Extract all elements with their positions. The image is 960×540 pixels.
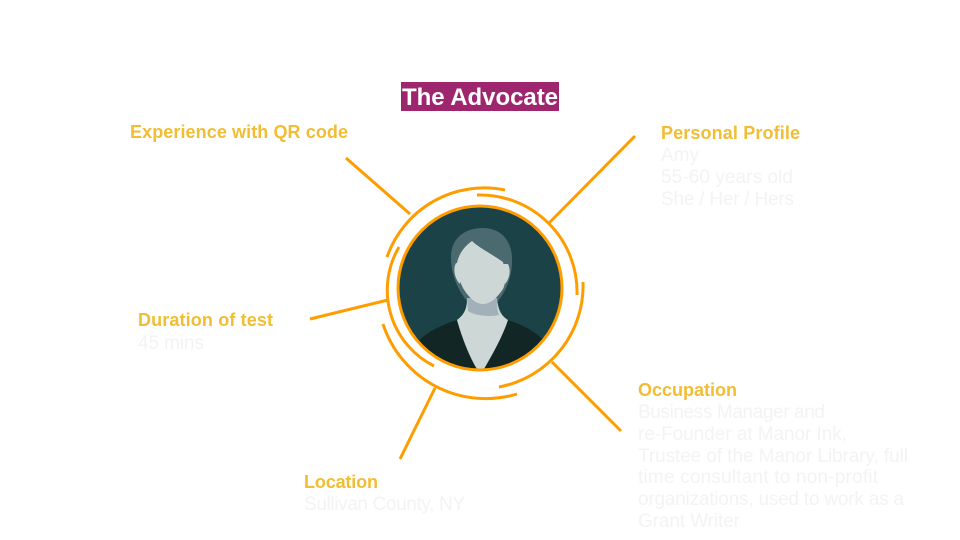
label: experience with QR code: Experience with QR code: [130, 122, 348, 142]
label: location: Location: [304, 472, 378, 492]
neck and chest: [457, 298, 508, 369]
label: duration of test: 45 mins: [138, 333, 204, 354]
portrait: woman avatar: [398, 206, 562, 375]
label: occupation: Occupation: [638, 380, 737, 400]
hair: [451, 228, 512, 301]
label: duration of test: Duration of test: [138, 310, 273, 330]
neck shadow: [467, 298, 499, 316]
label: occupation: re-Founder at Manor Ink,: [638, 424, 847, 445]
decorative orbit arcs: [383, 188, 583, 399]
label: occupation: organizations, used to work as a: [638, 489, 904, 510]
label: personal profile: Personal Profile: [661, 123, 800, 143]
ears: [454, 263, 510, 284]
label: location: Sullivan County, NY: [304, 494, 465, 515]
jacket: [419, 320, 542, 368]
label: location: [304, 472, 465, 515]
label: occupation: Grant Writer: [638, 511, 741, 532]
face: [457, 241, 505, 304]
label: occupation: Business Manager and: [638, 402, 825, 423]
label: occupation: time consultant to non-profit: [638, 467, 879, 488]
title: The Advocate: [402, 84, 558, 111]
connector lines: [310, 136, 635, 459]
label: personal profile: She / Her / Hers: [661, 189, 794, 210]
label: personal profile: [661, 123, 800, 210]
label: personal profile: Amy: [661, 145, 700, 166]
label: personal profile: 55-60 years old: [661, 167, 793, 188]
label: duration of test: [138, 310, 273, 354]
label: occupation: Trustee of the Manor Library, full: [638, 446, 908, 467]
label: occupation: [638, 380, 908, 532]
